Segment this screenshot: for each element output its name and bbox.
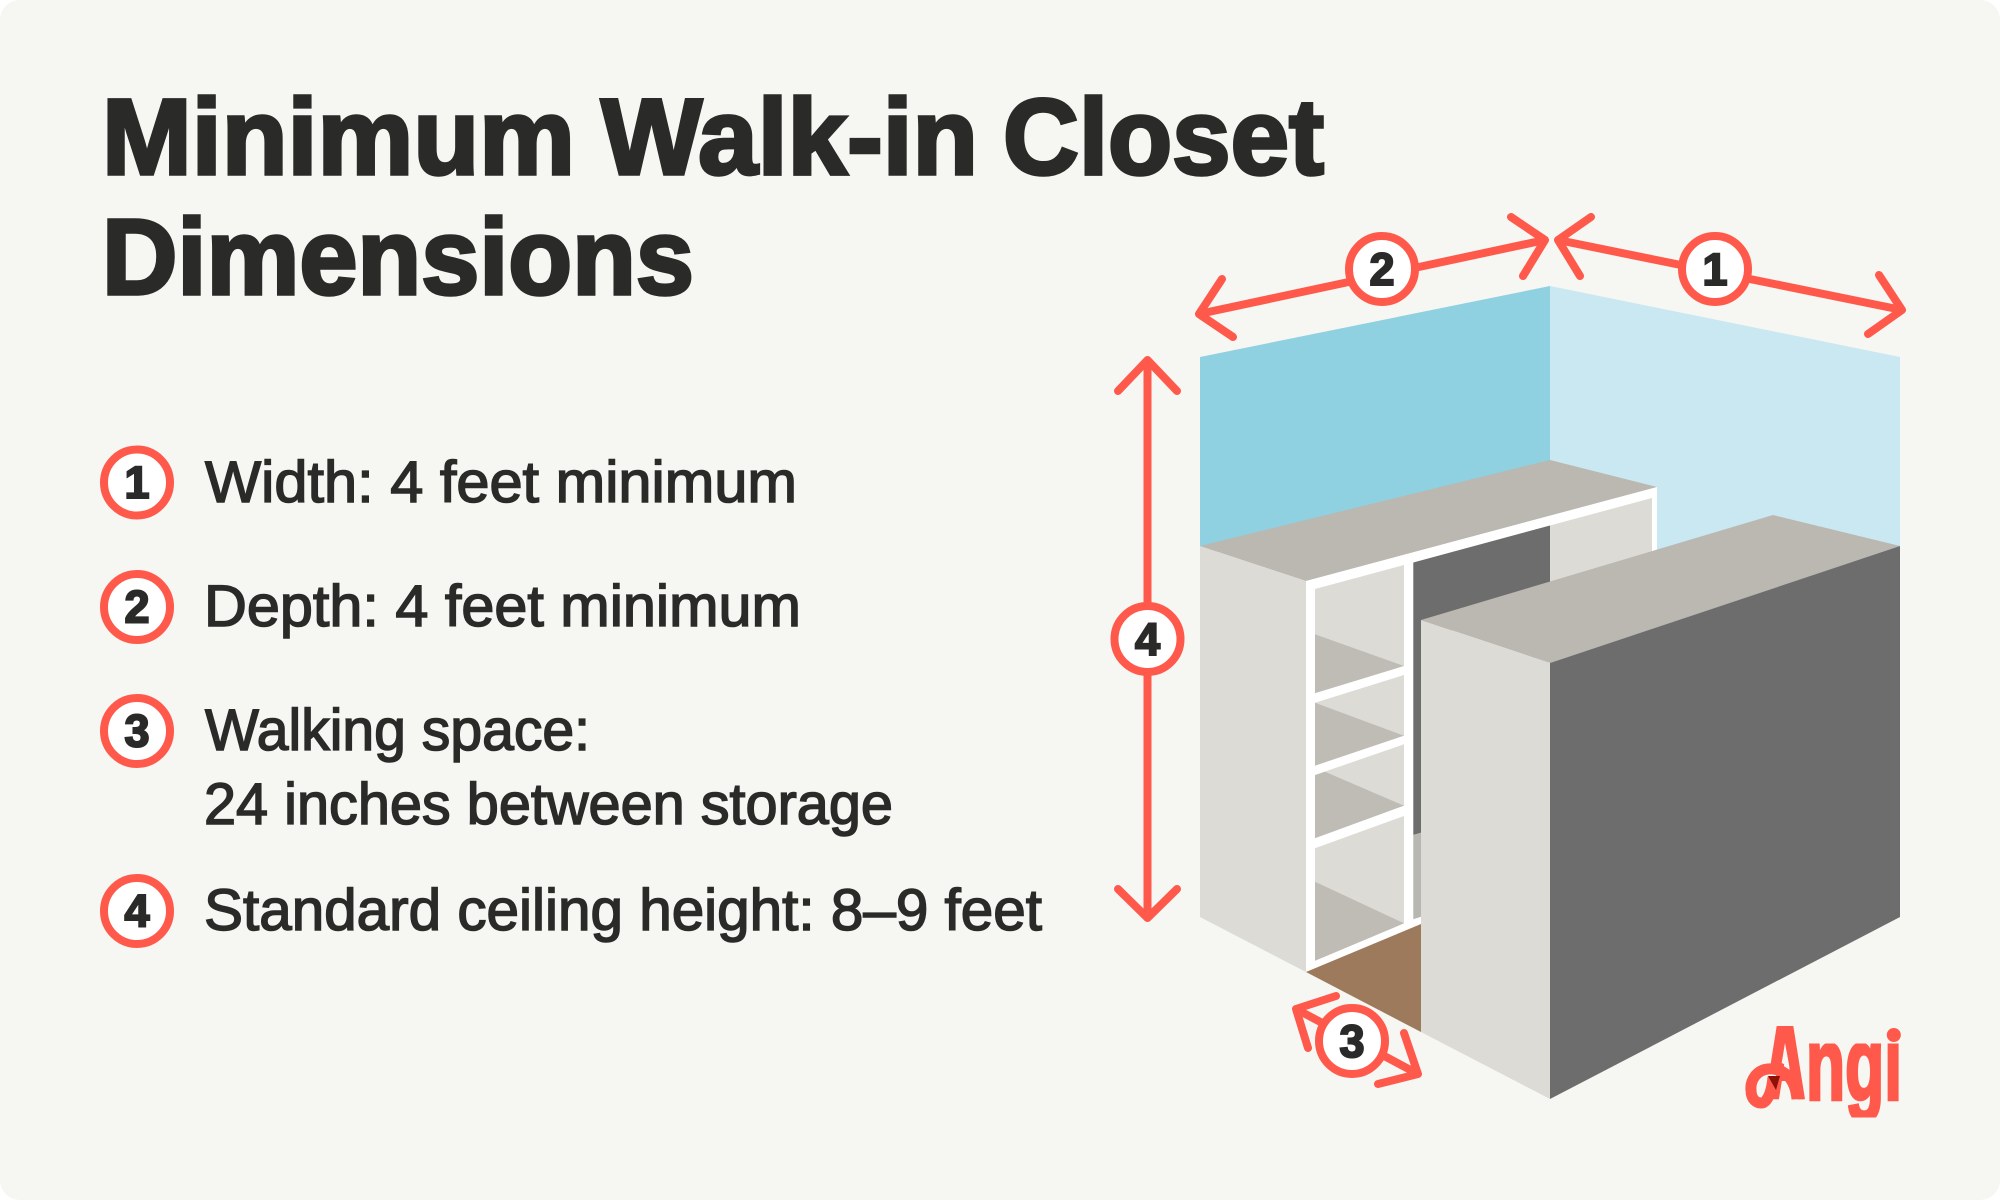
arrow 3: walking space: 3: [1339, 1016, 1365, 1067]
list item 2: depth: 2: [124, 582, 150, 632]
Angi logo: A: [1771, 1006, 1805, 1122]
floor: [1306, 924, 1421, 1032]
list item 2: depth: Depth: 4 feet minimum: [204, 574, 801, 639]
arrow 2: depth: 2: [1369, 244, 1395, 295]
list: closet dimensions: [104, 450, 1042, 944]
right storage unit: [1421, 515, 1900, 1099]
title: Dimensions: [102, 196, 694, 317]
back walls: [1200, 286, 1900, 600]
left storage unit: [1200, 460, 1657, 972]
title: Closet: [1003, 76, 1324, 197]
arrow 4: ceiling height: [1114, 360, 1180, 918]
list item 3: walking space: [104, 698, 893, 837]
list item 3: walking space: 24 inches between storage: [204, 772, 893, 837]
Angi logo: ngi: [1806, 1006, 1902, 1121]
list item 4: ceiling height: Standard ceiling height: 8–9 feet: [204, 878, 1042, 943]
title: Minimum: [102, 76, 575, 197]
list item 1: width: 1: [124, 457, 150, 508]
list item 4: ceiling height: 4: [124, 886, 150, 936]
title: [102, 76, 1324, 317]
arrow 4: ceiling height: 4: [1135, 614, 1160, 665]
list item 1: width: Width: 4 feet minimum: [205, 450, 797, 515]
arrow 2: depth: [1199, 217, 1545, 337]
closet illustration: [1200, 286, 1900, 1099]
Angi logo: [1745, 1026, 1901, 1118]
list item 3: walking space: 3: [124, 706, 150, 756]
arrow 3: walking space: [1296, 996, 1418, 1084]
list item 3: walking space: Walking space:: [205, 698, 590, 763]
title: Walk-in: [601, 76, 978, 197]
arrow 1: width: [1558, 217, 1902, 334]
arrow 1: width: 1: [1702, 244, 1728, 295]
